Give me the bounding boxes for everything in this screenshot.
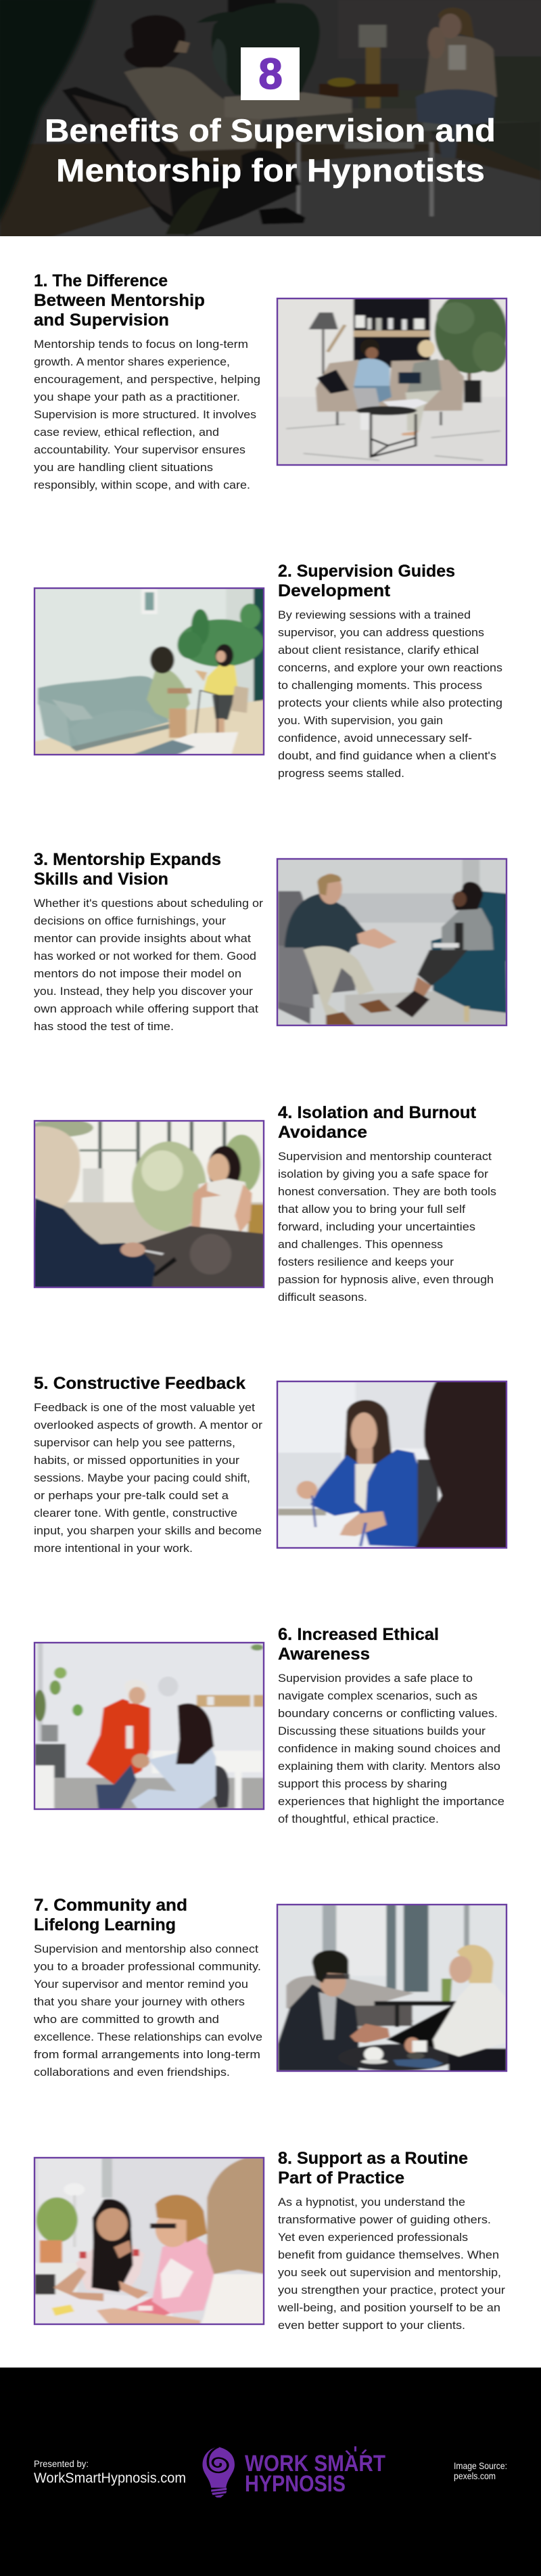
body text 1: Mentorship tends to focus on long-term [34, 338, 248, 351]
body text 8: benefit from guidance themselves. When [278, 2249, 499, 2261]
heading 7: 7. Community and [34, 1896, 187, 1915]
body text 5: sessions. Maybe your pacing could shift, [34, 1472, 250, 1484]
body text 3 [34, 897, 264, 1033]
body text 2: to challenging moments. This process [278, 680, 482, 692]
body text 5: Feedback is one of the most valuable yet [34, 1402, 255, 1414]
heading 5: 5. Constructive Feedback [34, 1374, 245, 1393]
body text 7: Supervision and mentorship also connect [34, 1943, 258, 1955]
number badge: 8 [258, 49, 283, 98]
body text 2: progress seems stalled. [278, 768, 404, 780]
photo 7: man and woman at a cafe table [273, 1902, 511, 2075]
body text 7: Your supervisor and mentor remind you [34, 1978, 248, 1991]
body text 3: you. Instead, they help you discover your [34, 985, 254, 998]
body text 4: that allow you to bring your full self [278, 1203, 465, 1216]
photo 2: women talking by a green sofa [31, 585, 269, 759]
heading 1 [34, 271, 205, 330]
image source [454, 2460, 507, 2481]
body text 1: you shape your path as a practitioner. [34, 391, 240, 403]
hero photo: two women in a therapy room, darkened [0, 0, 541, 236]
heading 8: Part of Practice [278, 2169, 404, 2188]
image source: Image Source: [454, 2460, 507, 2471]
body text 7: that you share your journey with others [34, 1996, 245, 2008]
body text 4: forward, including your uncertainties [278, 1221, 475, 1233]
heading 7: Lifelong Learning [34, 1915, 176, 1934]
body text 2: supervisor, you can address questions [278, 627, 484, 639]
panel: section 2 [31, 562, 502, 780]
body text 1: encouragement, and perspective, helping [34, 374, 260, 386]
panel: section 5 [34, 1374, 511, 1555]
heading 3 [34, 850, 221, 889]
body text 7: you to a broader professional community. [34, 1961, 261, 1973]
heading 8: 8. Support as a Routine [278, 2149, 468, 2168]
body text 4: difficult seasons. [278, 1291, 367, 1304]
heading 1: Between Mentorship [34, 291, 205, 310]
body text 6: Supervision provides a safe place to [278, 1672, 473, 1685]
heading 1: and Supervision [34, 311, 169, 330]
body text 1: case review, ethical reflection, and [34, 426, 219, 439]
body text 3: mentors do not impose their model on [34, 968, 241, 980]
body text 6: of thoughtful, ethical practice. [278, 1813, 439, 1825]
body text 7: from formal arrangements into long-term [34, 2049, 260, 2061]
photo 4: woman across a table by a bright window [31, 1118, 269, 1291]
heading 6: 6. Increased Ethical [278, 1625, 439, 1644]
body text 4: honest conversation. They are both tools [278, 1186, 496, 1198]
title [45, 112, 496, 188]
body text 7: collaborations and even friendships. [34, 2066, 230, 2079]
body text 3: has stood the test of time. [34, 1021, 174, 1033]
heading 1: 1. The Difference [34, 271, 168, 290]
photo 5: woman in a blue blazer [273, 1379, 511, 1552]
body text 8: well-being, and position yourself to be an [277, 2302, 500, 2314]
heading 3: 3. Mentorship Expands [34, 850, 221, 869]
body text 7: who are committed to growth and [33, 2014, 219, 2026]
body text 6 [278, 1672, 504, 1825]
body text 5: or perhaps your pre-talk could set a [34, 1490, 229, 1502]
body text 2: doubt, and find guidance when a client's [278, 750, 496, 762]
body text 8: Yet even experienced professionals [278, 2231, 468, 2244]
heading 6: Awareness [278, 1645, 370, 1664]
body text 6: boundary concerns or conflicting values. [278, 1708, 498, 1720]
body text 2: concerns, and explore your own reactions [278, 662, 502, 674]
heading 7 [34, 1896, 187, 1934]
panel: section 1 [34, 271, 511, 491]
body text 4 [278, 1151, 496, 1304]
photo 1: two women on a sofa [273, 290, 511, 469]
heading 8 [278, 2149, 468, 2188]
panel: section 4 [31, 1103, 496, 1304]
body text 4: isolation by giving you a safe space for [278, 1168, 489, 1180]
body text 5: input, you sharpen your skills and become [34, 1525, 262, 1537]
body text 8: As a hypnotist, you understand the [278, 2196, 465, 2208]
body text 6: support this process by sharing [278, 1778, 447, 1790]
header banner [0, 0, 541, 239]
body text 2 [278, 609, 502, 780]
panel: section 7 [33, 1896, 511, 2079]
body text 4: Supervision and mentorship counteract [278, 1151, 492, 1163]
logo: Work Smart Hypnosis [202, 2446, 385, 2497]
body text 5: more intentional in your work. [34, 1542, 193, 1555]
body text 1: responsibly, within scope, and with care. [34, 479, 250, 491]
body text 8: you seek out supervision and mentorship, [278, 2267, 501, 2279]
body text 5 [34, 1402, 263, 1555]
photo 8: three women at a desk [31, 2155, 269, 2328]
body text 2: about client resistance, clarify ethical [278, 644, 479, 657]
body text 6: navigate complex scenarios, such as [278, 1690, 477, 1702]
body text 4: fosters resilience and keeps your [278, 1256, 454, 1268]
heading 6 [278, 1625, 439, 1664]
body text 8: even better support to your clients. [278, 2319, 465, 2332]
body text 2: protects your clients while also protecting [278, 697, 502, 709]
body text 1: Supervision is more structured. It involves [34, 409, 256, 421]
body text 2: confidence, avoid unnecessary self- [278, 732, 472, 745]
heading 4 [278, 1103, 477, 1142]
body text 3: mentor can provide insights about what [34, 933, 251, 945]
number badge [241, 47, 300, 100]
body text 3: has worked or not worked for them. Good [34, 950, 256, 962]
heading 4: 4. Isolation and Burnout [278, 1103, 477, 1122]
body text 1 [34, 338, 260, 491]
logo: Work Smart Hypnosis: HYPNOSIS [245, 2471, 346, 2497]
body text 6: Discussing these situations builds your [278, 1725, 486, 1737]
body text 5: habits, or missed opportunities in your [34, 1454, 240, 1467]
body text 6: explaining them with clarity. Mentors also [278, 1760, 500, 1773]
heading 4: Avoidance [278, 1123, 367, 1142]
body text 1: growth. A mentor shares experience, [34, 356, 230, 368]
title: Mentorship for Hypnotists [56, 152, 485, 188]
body text 4: and challenges. This openness [278, 1239, 443, 1251]
heading 3: Skills and Vision [34, 870, 168, 889]
body text 4: passion for hypnosis alive, even through [278, 1274, 494, 1286]
body text 2: you. With supervision, you gain [278, 715, 443, 727]
footer [0, 2368, 541, 2576]
body text 5: overlooked aspects of growth. A mentor or [34, 1419, 263, 1431]
photo 6: handshake in a white office [31, 1640, 269, 1813]
body text 5: supervisor can help you see patterns, [34, 1437, 235, 1449]
heading 2 [278, 562, 455, 600]
photo 3: man and woman in armchairs [273, 856, 511, 1029]
body text 1: you are handling client situations [34, 462, 213, 474]
body text 6: confidence in making sound choices and [278, 1743, 500, 1755]
panel: section 6 [31, 1625, 504, 1825]
presented by: Presented by: [34, 2458, 89, 2469]
body text 3: Whether it's questions about scheduling or [34, 897, 264, 910]
heading 2: Development [278, 581, 391, 600]
presented by: WorkSmartHypnosis.com [34, 2470, 186, 2486]
body text 7: excellence. These relationships can evolve [34, 2031, 262, 2043]
heading 2: 2. Supervision Guides [278, 562, 455, 581]
title: Benefits of Supervision and [45, 112, 496, 148]
presented by [34, 2458, 186, 2486]
panel: section 3 [34, 850, 511, 1033]
panel: section 8 [31, 2149, 506, 2332]
body text 8 [277, 2196, 506, 2332]
body text 1: accountability. Your supervisor ensures [34, 444, 245, 456]
body text 3: decisions on office furnishings, your [34, 915, 227, 927]
body text 3: own approach while offering support that [34, 1003, 258, 1015]
body text 7 [33, 1943, 262, 2079]
body text 8: transformative power of guiding others. [278, 2214, 491, 2226]
body text 5: clearer tone. With gentle, constructive [34, 1507, 237, 1519]
image source: pexels.com [454, 2470, 496, 2481]
body text 8: you strengthen your practice, protect your [278, 2284, 506, 2296]
icon: spiral light bulb [203, 2446, 367, 2497]
body text 6: experiences that highlight the importance [278, 1796, 504, 1808]
body text 2: By reviewing sessions with a trained [278, 609, 471, 621]
logo: Work Smart Hypnosis: WORK SMART [245, 2451, 385, 2477]
